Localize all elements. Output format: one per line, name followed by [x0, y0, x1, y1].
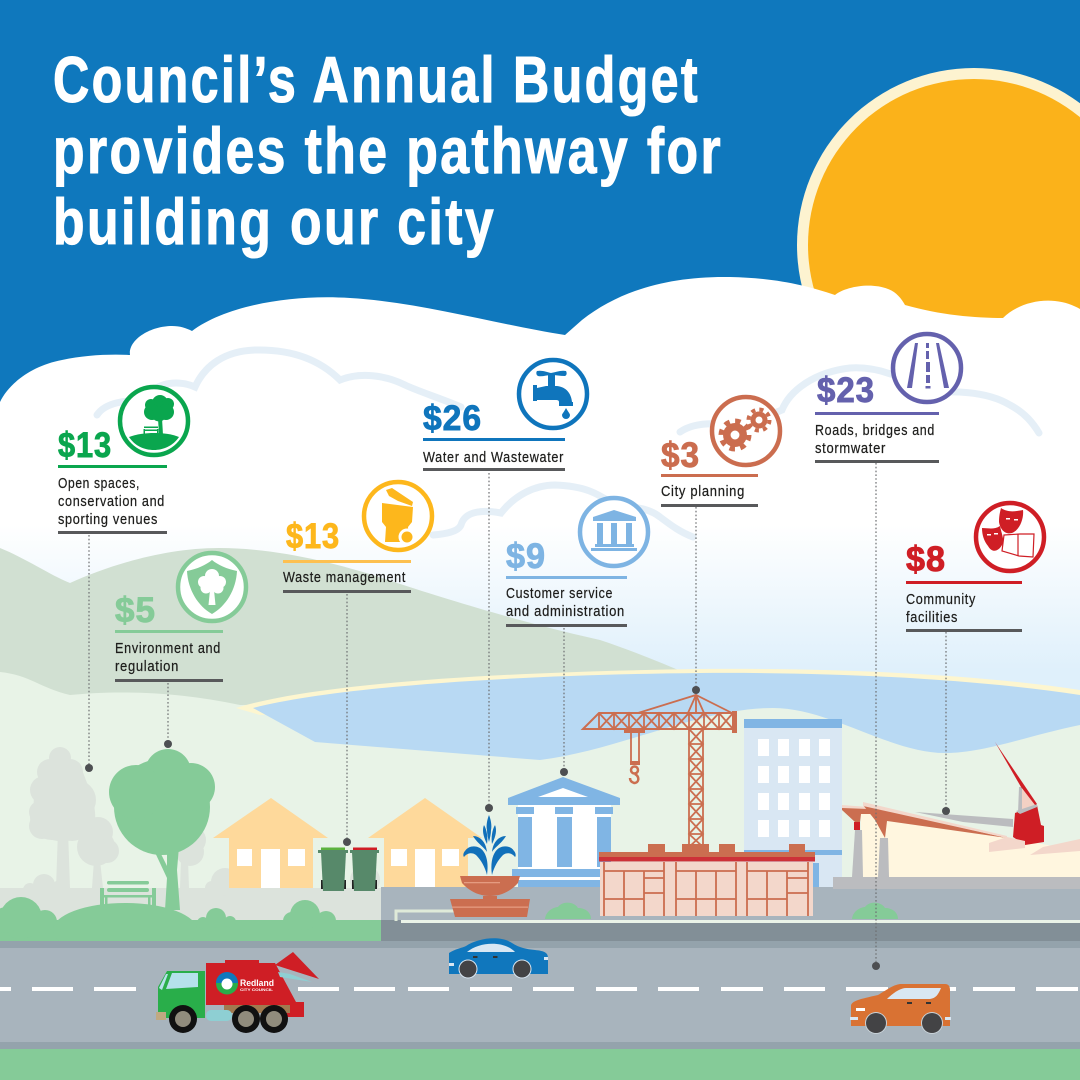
panel: roads $23	[815, 334, 961, 463]
garbage truck: Redland	[240, 978, 274, 989]
green-lid bin	[318, 848, 348, 891]
panel: environment $5: regulation	[115, 658, 179, 675]
park bench	[100, 881, 156, 906]
icon: theatre masks and book	[976, 503, 1044, 571]
icon: road	[893, 334, 961, 402]
house two	[368, 798, 482, 888]
panel: waste $13	[283, 482, 432, 593]
panel: water $26: Water and Wastewater	[423, 449, 564, 466]
lake with pale shore band	[236, 669, 1080, 760]
blue car	[449, 938, 548, 978]
panel: open spaces $13: sporting venues	[58, 511, 158, 528]
panel: waste $13: Waste management	[283, 569, 406, 586]
icon: tree on hill	[120, 387, 188, 455]
cultural centre building	[833, 742, 1080, 889]
panel: environment $5	[115, 553, 246, 682]
dotted leader lines	[85, 463, 950, 970]
panel: roads $23: $23	[817, 371, 875, 410]
panel: community facilities $8: $8	[906, 540, 946, 579]
pavement and kerb	[381, 887, 1080, 941]
panel: open spaces $13	[58, 387, 188, 534]
low retail building	[599, 844, 815, 916]
title: building our city	[53, 185, 496, 258]
title: Council’s Annual Budget	[53, 43, 700, 116]
icon: classical building	[580, 498, 648, 566]
red-lid bin	[350, 848, 379, 891]
icon: gears	[712, 397, 780, 465]
panel: open spaces $13: Open spaces,	[58, 475, 140, 492]
house one	[213, 798, 328, 888]
background: blue sky	[0, 0, 1080, 480]
panel: environment $5: $5	[115, 591, 156, 630]
orange car	[850, 984, 951, 1034]
panel: customer service $9: $9	[506, 537, 546, 576]
title	[53, 43, 723, 258]
panel: city planning $3: $3	[661, 436, 700, 475]
tall office building	[744, 719, 842, 887]
panel: customer service $9: and administration	[506, 603, 625, 620]
panel: water $26	[423, 360, 587, 471]
panel: customer service $9: Customer service	[506, 585, 613, 602]
panel: community facilities $8	[906, 503, 1044, 632]
panel: city planning $3	[661, 397, 780, 507]
garbage truck: CITY COUNCIL	[240, 987, 274, 992]
panel: city planning $3: City planning	[661, 483, 745, 500]
grey background trees	[0, 747, 381, 922]
panel: waste $13: $13	[286, 517, 340, 556]
fountain	[450, 815, 530, 917]
icon: water tap	[519, 360, 587, 428]
back hill	[0, 548, 690, 730]
title: provides the pathway for	[53, 114, 723, 187]
front light green ground	[0, 672, 1080, 900]
panel: open spaces $13: $13	[58, 426, 112, 465]
panel: customer service $9	[506, 498, 648, 627]
panel: community facilities $8: Community	[906, 591, 976, 608]
panel: roads $23: stormwater	[815, 440, 886, 457]
faint background clouds	[97, 350, 1039, 537]
icon: sun	[797, 68, 1080, 422]
panel: open spaces $13: conservation and	[58, 493, 165, 510]
museum building	[508, 777, 620, 887]
garbage truck	[156, 952, 319, 1033]
panel: community facilities $8: facilities	[906, 609, 958, 626]
panel: water $26: $26	[423, 399, 482, 438]
tower crane	[583, 695, 737, 847]
panel: environment $5: Environment and	[115, 640, 221, 657]
green foreground park	[0, 897, 381, 957]
wheelie bins	[318, 848, 379, 891]
green tree	[109, 749, 215, 910]
houses	[213, 798, 482, 888]
icon: wheelie bin	[364, 482, 432, 550]
panel: roads $23: Roads, bridges and	[815, 422, 935, 439]
large white cloud	[0, 277, 1080, 720]
road	[0, 941, 1080, 1080]
shrubs on pavement	[545, 903, 898, 919]
icon: shield tree	[178, 553, 246, 621]
